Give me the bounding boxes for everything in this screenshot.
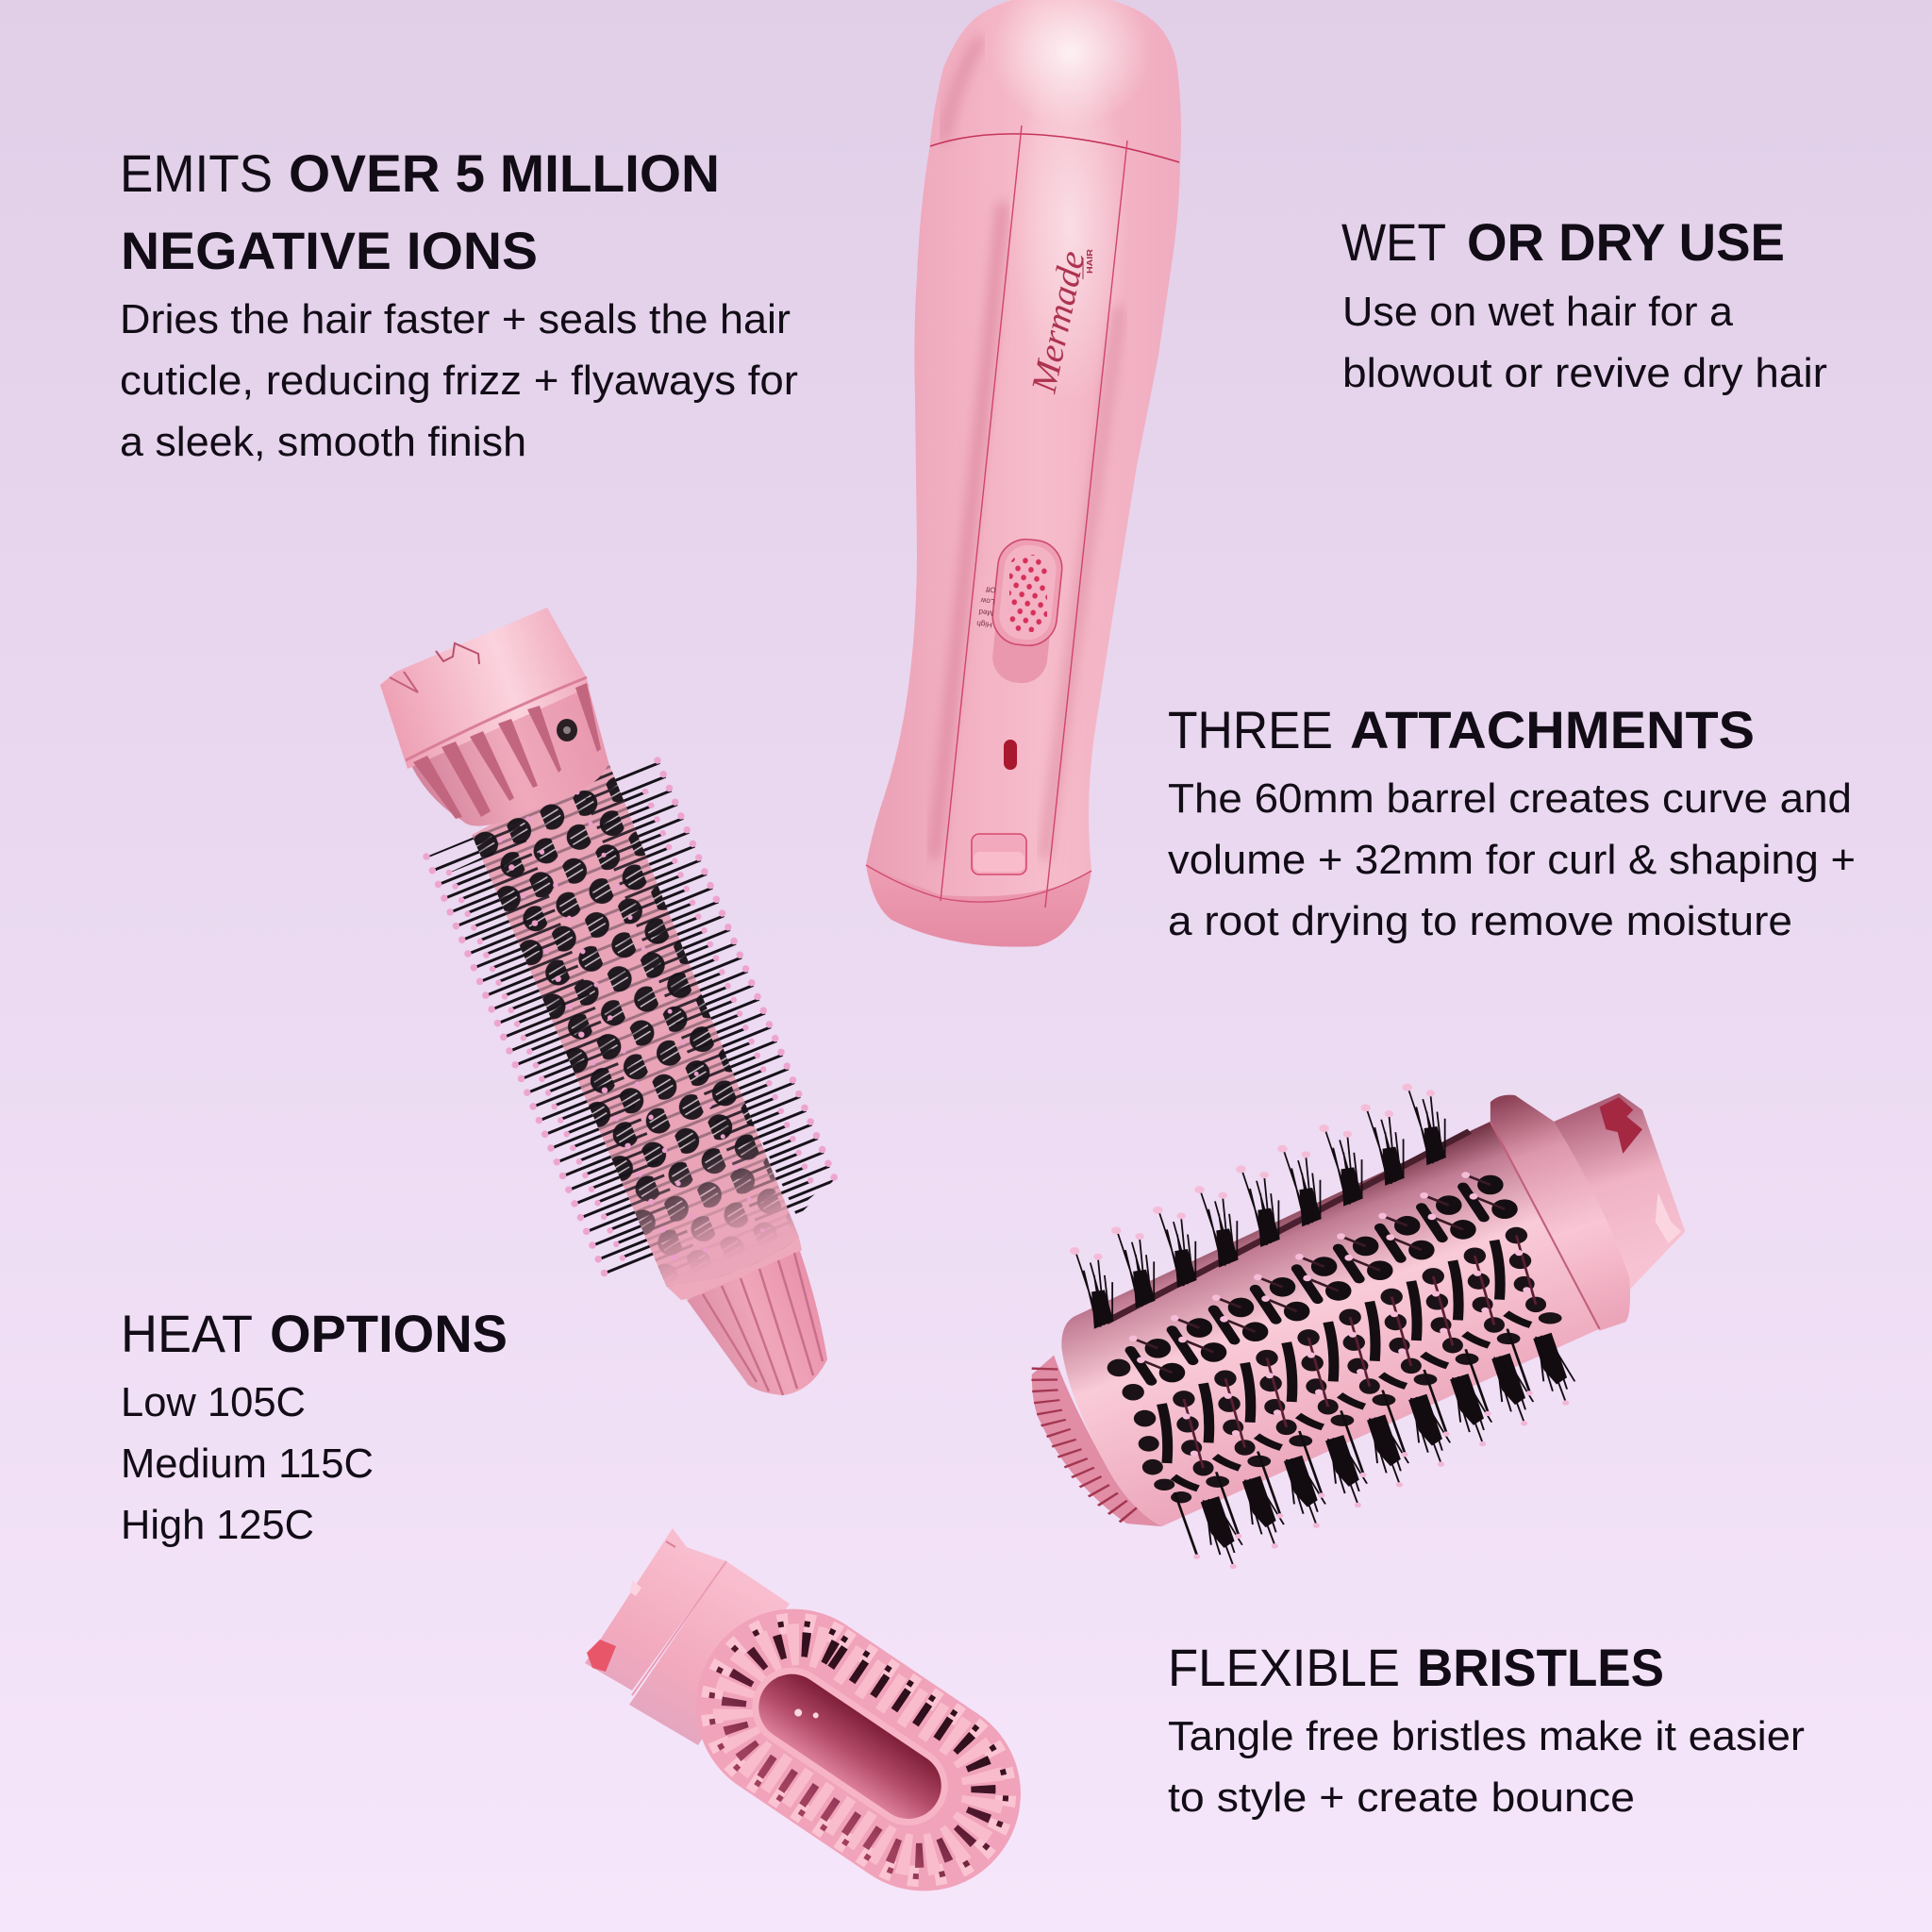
description: to style + create bounce [1168,1774,1635,1821]
heading: FLEXIBLE [1168,1638,1400,1697]
attachment collar [380,608,608,826]
description [1168,1713,1805,1821]
heading: NEGATIVE IONS [121,221,538,280]
heading: OVER 5 MILLION [289,143,720,203]
product: thin round brush attachment [380,608,835,1395]
dryer base [866,865,1091,947]
feature: three attachments [1168,700,1856,944]
description: Dries the hair faster + seals the hair [120,296,791,342]
switch labels: High [976,619,992,629]
heading: OPTIONS [270,1304,508,1363]
product: root drying nozzle attachment [585,1528,1058,1928]
product: hair dryer handle [866,0,1181,947]
description: Low 105C [121,1379,306,1425]
dryer shading [934,0,1151,858]
nozzle head [658,1572,1058,1928]
description [120,296,798,465]
dryer body [866,0,1181,896]
heading: ATTACHMENTS [1350,700,1755,759]
product: wide round brush attachment [1032,1084,1685,1569]
barrel body [1061,1122,1600,1526]
description: cuticle, reducing frizz + flyaways for [120,358,798,404]
switch labels: Med [978,608,994,618]
barrel [472,762,799,1287]
indicator light [1004,740,1017,770]
heading [1168,700,1755,759]
heading: THREE [1168,700,1333,759]
brand logo: HAIR [1086,249,1094,274]
tapered tip [667,1238,827,1395]
heading: EMITS [120,143,273,203]
collar [1491,1095,1630,1331]
bristle columns [1070,1084,1574,1569]
description [1168,775,1856,944]
feature: negative ions [120,143,798,465]
neck [1554,1093,1685,1290]
rear bristles [426,758,835,1283]
switch labels: Off [985,585,996,594]
heading: HEAT [121,1304,253,1363]
heading: WET [1341,212,1446,272]
barrel holes [472,762,799,1287]
feature: wet or dry use [1341,212,1827,396]
description: The 60mm barrel creates curve and [1168,775,1852,822]
nozzle neck [629,1561,790,1745]
switch labels [976,584,996,629]
heat switch [976,537,1065,686]
heading [121,1304,508,1363]
description: blowout or revive dry hair [1342,350,1827,396]
description: Use on wet hair for a [1342,289,1734,335]
heading: OR DRY USE [1467,212,1785,272]
extra holes at barrel end [1108,1359,1191,1503]
base ring [1032,1356,1161,1526]
description: Medium 115C [121,1441,374,1487]
heading: BRISTLES [1417,1638,1664,1697]
description: a root drying to remove moisture [1168,898,1792,944]
heading [1168,1638,1664,1697]
brand logo: Mermade [1024,247,1092,397]
description: volume + 32mm for curl & shaping + [1168,837,1856,883]
heading [120,143,720,280]
description [121,1379,374,1548]
feature: flexible bristles [1168,1638,1805,1821]
release button [972,834,1026,874]
nozzle cavity [746,1661,954,1832]
switch labels: Low [980,596,995,606]
ridge [1106,1131,1470,1322]
front bristle tips [426,760,835,1283]
description: a sleek, smooth finish [120,419,526,465]
feature: heat options [121,1304,508,1548]
description: Tangle free bristles make it easier [1168,1713,1805,1759]
description: High 125C [121,1502,314,1548]
description [1342,289,1827,396]
